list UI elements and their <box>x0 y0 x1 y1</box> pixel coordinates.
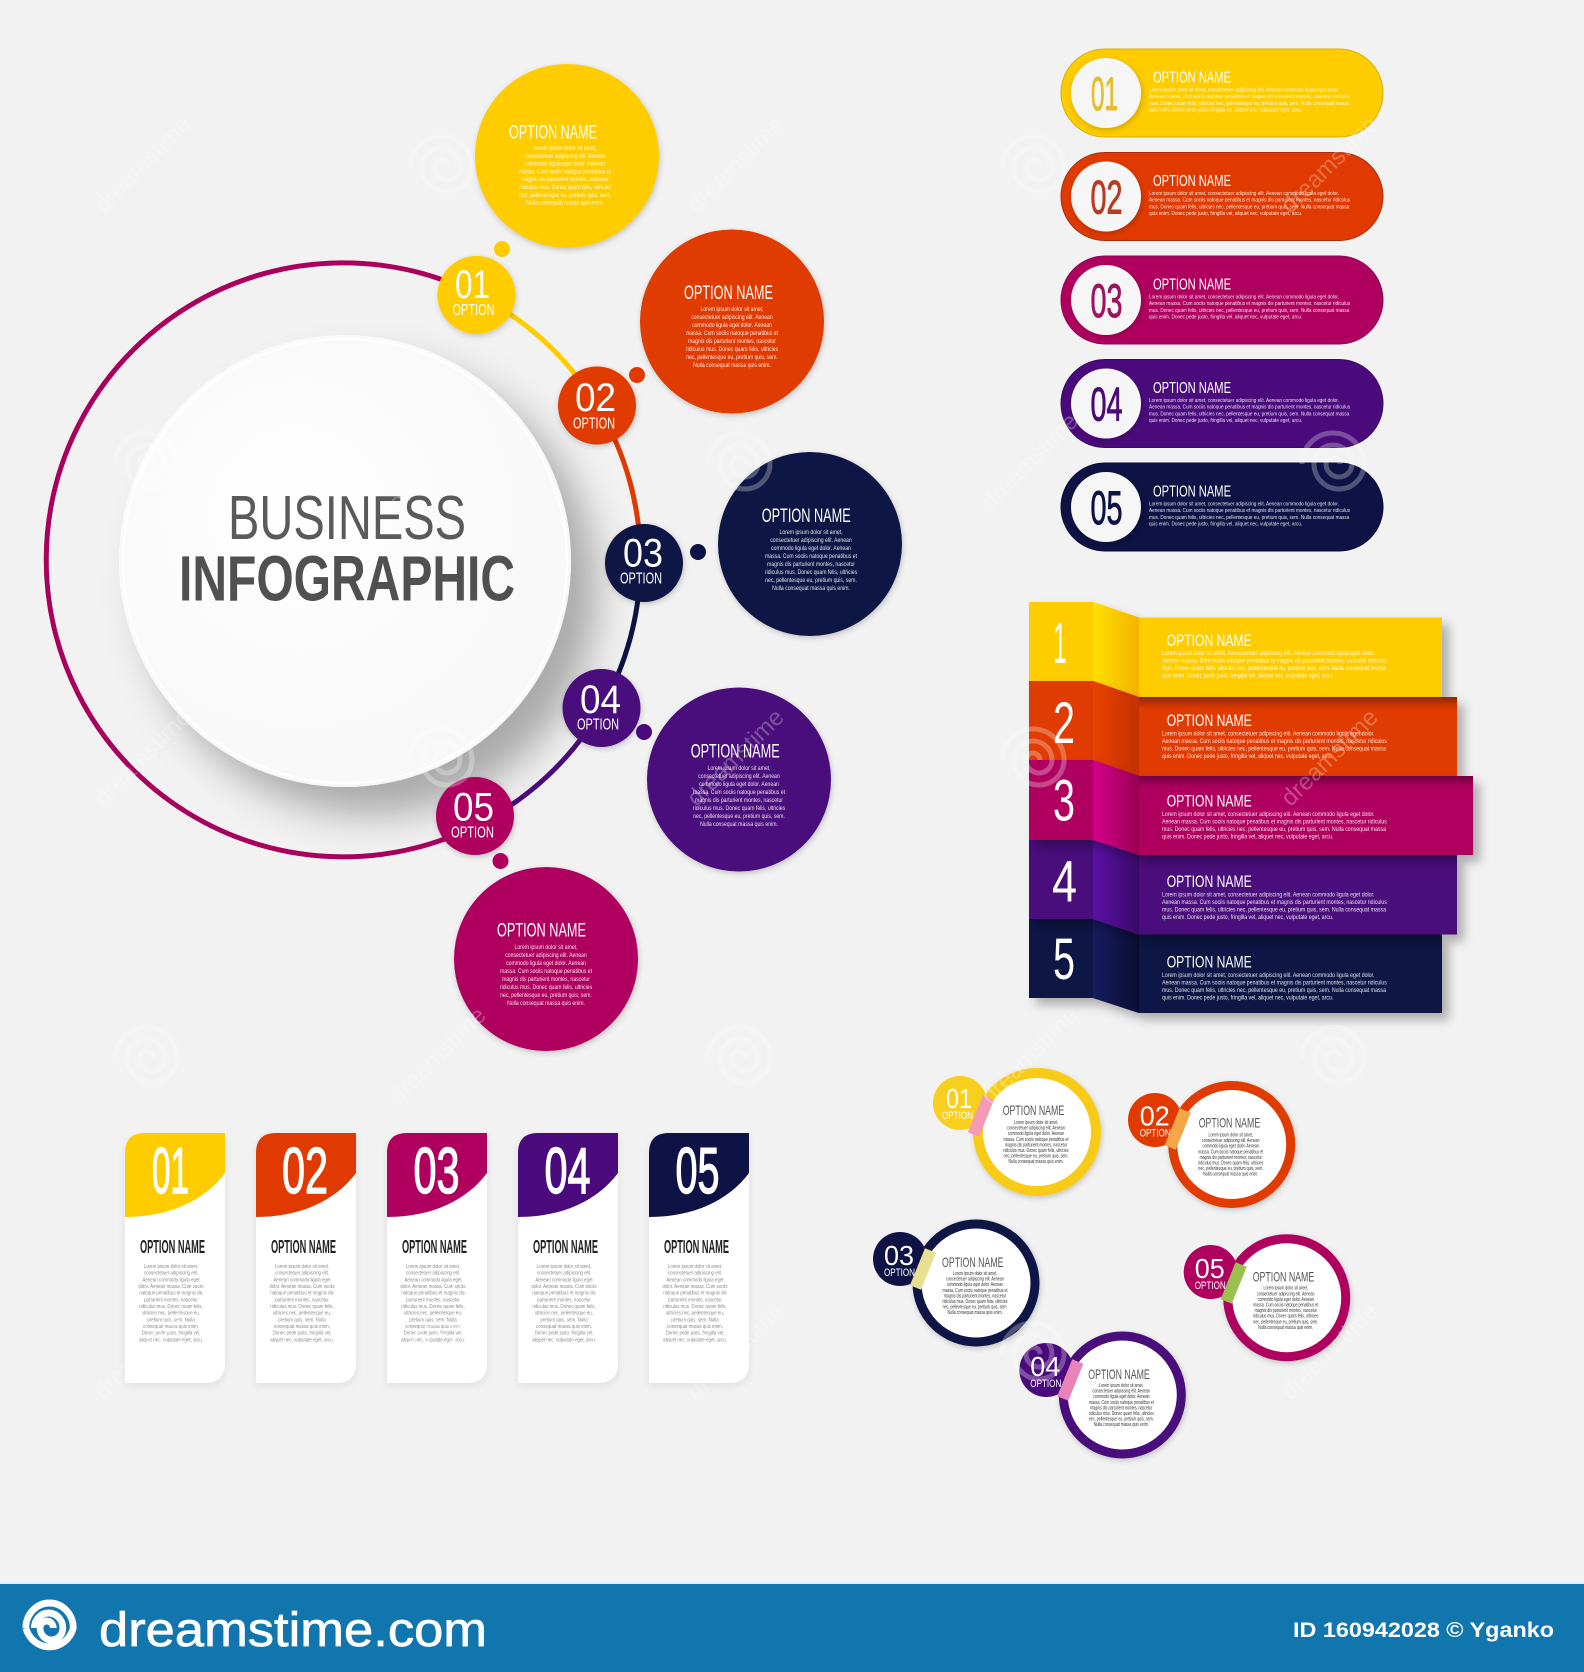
pill 01 <box>1061 49 1383 137</box>
option bubble 05 <box>454 867 638 1051</box>
pill 04: Aenean massa. Cum sociis natoque penatibus et magnis dis parturient montes, nascetur ridiculus <box>1149 404 1350 411</box>
ring badge 05: OPTION <box>1195 1280 1226 1292</box>
node 02: OPTION <box>573 416 615 433</box>
ring badge 05: consectetuer adipiscing elit. Aenean <box>1257 1291 1315 1296</box>
card 02: ridiculus mus. Donec quam felis, <box>270 1304 334 1310</box>
image id: ID 160942028 © Yganko <box>1293 1619 1554 1642</box>
watermark overlay: dreamstime <box>89 704 197 812</box>
card 03: consectetuer adipiscing elit. <box>406 1270 460 1277</box>
ring badge 05: magnis dis parturient montes, nascetur <box>1255 1307 1317 1313</box>
panel: vertical cards <box>125 1133 749 1383</box>
card 04: consequat massa quis enim. <box>536 1324 592 1330</box>
card 01: Lorem ipsum dolor sit amet, <box>144 1264 198 1270</box>
central white disc with title <box>119 335 571 787</box>
option bubble 04: consectetuer adipiscing elit. Aenean <box>698 774 780 780</box>
card 01: ultricies nec, pellentesque eu, <box>142 1310 200 1317</box>
ring badge 04: nec, pellentesque eu, pretium quis, sem. <box>1089 1416 1154 1422</box>
ribbon 4: 4 <box>1052 850 1077 915</box>
pill 05: mus. Donec quam felis, ultricies nec, pellentesque eu, pretium quis, sem. Nulla consequat massa <box>1149 514 1349 521</box>
ring badge 02: 02 <box>1140 1100 1170 1132</box>
icon: spiral logo <box>26 1603 73 1647</box>
ring track <box>46 263 640 857</box>
ring badge 03: magnis dis parturient montes, nascetur <box>944 1293 1007 1299</box>
card 02: consequat massa quis enim. <box>274 1324 330 1330</box>
ribbon 1: mus. Donec quam felis, ultricies nec, pellentesque eu, pretium quis, sem. Nulla consequat massa <box>1162 666 1387 672</box>
ring badge 05: nec, pellentesque eu, pretium quis, sem. <box>1253 1319 1318 1324</box>
option bubble 03: massa. Cum sociis natoque penatibus et <box>765 554 857 560</box>
watermark overlay: dreamstime <box>89 111 197 219</box>
card 05 <box>649 1133 749 1383</box>
card 05: ultricies nec, pellentesque eu, <box>666 1310 724 1317</box>
card 05: pretium quis, sem. Nulla <box>671 1317 719 1324</box>
ribbon 3: Lorem ipsum dolor sit amet, consectetuer adipiscing elit. Aenean commodo ligula eget dolor. <box>1162 812 1375 818</box>
ribbon 2: OPTION NAME <box>1167 711 1252 730</box>
node 05 <box>436 777 514 869</box>
pill 02: Aenean massa. Cum sociis natoque penatibus et magnis dis parturient montes, nascetur ridiculus <box>1149 197 1350 204</box>
ribbon 4: quis enim. Donec pede justo, fringilla vel, aliquet nec, vulputate eget, arcu. <box>1162 915 1334 921</box>
card 04: pretium quis, sem. Nulla <box>540 1317 588 1324</box>
option bubble 01: Nulla consequat massa quis enim. <box>526 200 604 207</box>
option bubble 02: ridiculus mus. Donec quam felis, ultricies <box>686 347 778 353</box>
option bubble 03: consectetuer adipiscing elit. Aenean <box>770 538 852 544</box>
card 03: ridiculus mus. Donec quam felis, <box>401 1304 465 1310</box>
card 02: dolor. Aenean massa. Cum sociis <box>269 1284 335 1290</box>
ring badge 05 <box>1184 1239 1346 1357</box>
option bubble 04 <box>647 688 831 872</box>
pill 02: OPTION NAME <box>1153 173 1231 190</box>
pill 03: 03 <box>1090 274 1122 327</box>
ribbon 2: 2 <box>1053 691 1075 756</box>
pill 05: Aenean massa. Cum sociis natoque penatibus et magnis dis parturient montes, nascetur ridiculus <box>1149 508 1350 514</box>
pill 02: 02 <box>1090 170 1122 224</box>
node 05: OPTION <box>451 824 494 842</box>
option bubble 04: ridiculus mus. Donec quam felis, ultricies <box>693 806 785 812</box>
option bubble 04: OPTION NAME <box>691 742 780 763</box>
option bubble 05: commodo ligula eget dolor. Aenean <box>506 961 586 967</box>
node 04 <box>562 669 652 747</box>
option bubble 02: Nulla consequat massa quis enim. <box>693 363 771 369</box>
title: INFOGRAPHIC <box>179 543 515 615</box>
node 02: 02 <box>575 376 616 420</box>
card 01: consectetuer adipiscing elit. <box>144 1270 198 1277</box>
panel: taped ring badges <box>873 1073 1346 1454</box>
node 03: OPTION <box>620 571 662 588</box>
pill 01: Lorem ipsum dolor sit amet, consectetuer adipiscing elit. Aenean commodo ligula eget dolor. <box>1149 87 1339 94</box>
card 03: pretium quis, sem. Nulla <box>409 1317 457 1324</box>
pill 02: quis enim. Donec pede justo, fringilla vel, aliquet nec, vulputate eget, arcu. <box>1149 211 1302 217</box>
watermark overlay: dreamstime <box>384 1002 492 1110</box>
watermark overlay: dreamstime <box>682 704 790 812</box>
pill 03 <box>1061 256 1383 344</box>
option bubble 02: OPTION NAME <box>684 283 773 304</box>
option bubble 01: massa. Cum sociis natoque penatibus et <box>519 169 611 176</box>
card 05: ridiculus mus. Donec quam felis, <box>663 1304 727 1310</box>
ribbon 1: 1 <box>1053 611 1067 676</box>
ring badge 01: magnis dis parturient montes, nascetur <box>1005 1142 1068 1148</box>
ring badge 04: magnis dis parturient montes, nascetur <box>1090 1405 1153 1411</box>
ribbon 4 <box>1029 840 1457 934</box>
pill 03: quis enim. Donec pede justo, fringilla vel, aliquet nec, vulputate eget, arcu. <box>1149 314 1302 321</box>
ring badge 04: commodo ligula eget dolor. Aenean <box>1093 1394 1150 1399</box>
pill 03: Aenean massa. Cum sociis natoque penatibus et magnis dis parturient montes, nascetur ridiculus <box>1149 301 1350 307</box>
ring badge 03: nec, pellentesque eu, pretium quis, sem. <box>943 1304 1007 1310</box>
ribbon 1: OPTION NAME <box>1167 631 1252 650</box>
pill 01: quis enim. Donec pede justo, fringilla vel, aliquet nec, vulputate eget, arcu. <box>1149 107 1302 114</box>
card 01: 01 <box>152 1134 189 1207</box>
card 01: consequat massa quis enim. <box>143 1324 199 1330</box>
card 05: consectetuer adipiscing elit. <box>668 1270 722 1277</box>
ring badge 01: nec, pellentesque eu, pretium quis, sem. <box>1004 1153 1068 1159</box>
option bubble 01: Lorem ipsum dolor sit amet, <box>533 146 597 152</box>
card 03: OPTION NAME <box>402 1236 467 1257</box>
option bubble 03: Lorem ipsum dolor sit amet, <box>779 530 843 536</box>
option bubble 02: Lorem ipsum dolor sit amet, <box>700 307 764 313</box>
ring badge 04: Lorem ipsum dolor sit amet, <box>1099 1382 1144 1388</box>
card 05: aliquet nec, vulputate eget, arcu. <box>663 1337 727 1344</box>
option bubble 05: magnis dis parturient montes, nascetur <box>502 977 590 983</box>
ribbon 3: quis enim. Donec pede justo, fringilla vel, aliquet nec, vulputate eget, arcu. <box>1162 834 1334 841</box>
ribbon 1 <box>1029 602 1442 697</box>
pill 04: 04 <box>1090 378 1122 430</box>
card 04: ultricies nec, pellentesque eu, <box>535 1310 593 1317</box>
ring badge 05: 05 <box>1195 1253 1225 1284</box>
ring badge 03: commodo ligula eget dolor. Aenean <box>947 1282 1004 1287</box>
card 02: 02 <box>282 1134 328 1207</box>
ribbon 4: Lorem ipsum dolor sit amet, consectetuer adipiscing elit. Aenean commodo ligula eget dolor. <box>1162 892 1375 899</box>
ring badge 03: Lorem ipsum dolor sit amet, <box>953 1270 997 1276</box>
ring badge 04: massa. Cum sociis natoque penatibus et <box>1089 1399 1154 1405</box>
ring badge 01: OPTION NAME <box>1003 1102 1064 1118</box>
card 04: aliquet nec, vulputate eget, arcu. <box>532 1337 596 1344</box>
card 04 <box>518 1133 618 1383</box>
option bubble 02: consectetuer adipiscing elit. Aenean <box>691 315 773 321</box>
card 02: Donec pede justo, fringilla vel, <box>273 1330 331 1337</box>
ribbon 1: Lorem ipsum dolor sit amet, consectetuer adipiscing elit. Aenean commodo ligula eget dolor. <box>1162 651 1375 657</box>
card 04: parturient montes, nascetur <box>537 1297 591 1304</box>
ribbon 1: Aenean massa. Cum sociis natoque penatibus et magnis dis parturient montes, nascetur ridiculus <box>1162 658 1387 665</box>
option bubble 03: magnis dis parturient montes, nascetur <box>767 562 855 568</box>
card 03: parturient montes, nascetur <box>406 1297 460 1304</box>
watermark overlay: dreamstime <box>976 1002 1084 1110</box>
ribbon 1: quis enim. Donec pede justo, fringilla vel, aliquet nec, vulputate eget, arcu. <box>1162 673 1334 680</box>
card 04: natoque penatibus et magnis dis <box>532 1290 596 1297</box>
option bubble 04: Lorem ipsum dolor sit amet, <box>707 766 771 772</box>
watermark overlay: dreamstime <box>976 408 1084 516</box>
node 03 <box>605 524 706 602</box>
ribbon 5: Lorem ipsum dolor sit amet, consectetuer adipiscing elit. Aenean commodo ligula eget dolor. <box>1162 973 1375 979</box>
option bubble 01: OPTION NAME <box>509 123 597 144</box>
ring badge 02: OPTION NAME <box>1199 1114 1260 1130</box>
ring badge 04: OPTION <box>1030 1378 1061 1390</box>
option bubble 04: magnis dis parturient montes, nascetur <box>695 798 783 804</box>
ring badge 04: Nulla consequat massa quis enim. <box>1094 1422 1149 1427</box>
ribbon 5: Aenean massa. Cum sociis natoque penatibus et magnis dis parturient montes, nascetur ridiculus <box>1162 980 1387 987</box>
card 03: aliquet nec, vulputate eget, arcu. <box>401 1337 465 1344</box>
title <box>179 484 515 615</box>
card 03 <box>387 1133 487 1383</box>
ribbon 4: Aenean massa. Cum sociis natoque penatibus et magnis dis parturient montes, nascetur ridiculus <box>1162 900 1387 906</box>
node 04: 04 <box>580 678 621 722</box>
option bubble 02: massa. Cum sociis natoque penatibus et <box>686 331 778 337</box>
ribbon 2: quis enim. Donec pede justo, fringilla vel, aliquet nec, vulputate eget, arcu. <box>1162 754 1334 760</box>
card 01: OPTION NAME <box>140 1236 205 1257</box>
watermark overlay: dreamstime <box>384 408 492 516</box>
watermark overlay: dreamstime <box>89 1298 197 1406</box>
watermark overlay: dreamstime <box>1276 111 1384 219</box>
brand name: dreamstime.com <box>99 1604 487 1657</box>
ring badge 02: massa. Cum sociis natoque penatibus et <box>1198 1149 1264 1154</box>
ring badge 03: OPTION NAME <box>942 1254 1004 1270</box>
ring badge 02: Nulla consequat massa quis enim. <box>1203 1171 1258 1177</box>
ribbon 3 <box>1029 760 1473 855</box>
ribbon 3: 3 <box>1053 769 1075 834</box>
ring badge 03: consectetuer adipiscing elit. Aenean <box>946 1276 1004 1282</box>
ring badge 03 <box>873 1224 1035 1342</box>
ribbon 5: OPTION NAME <box>1167 953 1252 972</box>
option bubble 03: Nulla consequat massa quis enim. <box>772 586 850 592</box>
ribbon 2: Lorem ipsum dolor sit amet, consectetuer adipiscing elit. Aenean commodo ligula eget dolor. <box>1162 731 1375 738</box>
ring badge 04 <box>1019 1336 1181 1454</box>
card 03: Lorem ipsum dolor sit amet, <box>406 1264 460 1270</box>
ring badge 05: Lorem ipsum dolor sit amet, <box>1263 1285 1308 1291</box>
watermark overlay <box>89 111 1384 1406</box>
ring badge 05: commodo ligula eget dolor. Aenean <box>1258 1296 1314 1302</box>
ring badge 02: Lorem ipsum dolor sit amet, <box>1208 1132 1253 1138</box>
option bubble 01: commodo ligula eget dolor. Aenean <box>525 161 605 168</box>
ribbon 3: Aenean massa. Cum sociis natoque penatibus et magnis dis parturient montes, nascetur ridiculus <box>1162 819 1387 826</box>
card 05: Aenean commodo ligula eget <box>666 1277 724 1284</box>
ribbon 4: OPTION NAME <box>1167 872 1252 891</box>
option bubble 05: consectetuer adipiscing elit. Aenean <box>505 953 587 959</box>
pill 05: Lorem ipsum dolor sit amet, consectetuer adipiscing elit. Aenean commodo ligula eget dolor. <box>1149 501 1339 508</box>
pill 04: quis enim. Donec pede justo, fringilla vel, aliquet nec, vulputate eget, arcu. <box>1149 418 1302 424</box>
card 05: OPTION NAME <box>664 1236 729 1257</box>
option bubble 01: nec, pellentesque eu, pretium quis, sem. <box>519 192 611 199</box>
option bubble 02: magnis dis parturient montes, nascetur <box>688 339 776 345</box>
ribbon 2 <box>1029 681 1457 776</box>
option bubble 05: ridiculus mus. Donec quam felis, ultricies <box>500 985 592 991</box>
panel: pill list <box>1061 49 1383 551</box>
pill 02 <box>1061 152 1383 240</box>
card 02: Aenean commodo ligula eget <box>273 1277 331 1284</box>
option bubble 05: Nulla consequat massa quis enim. <box>507 1001 585 1007</box>
card 05: parturient montes, nascetur <box>668 1297 722 1304</box>
node 02 <box>558 366 645 444</box>
ribbon 2: Aenean massa. Cum sociis natoque penatibus et magnis dis parturient montes, nascetur ridiculus <box>1162 739 1387 745</box>
ring badge 02: ridiculus mus. Donec quam felis, ultricies <box>1198 1160 1264 1166</box>
card 01: ridiculus mus. Donec quam felis, <box>139 1304 203 1310</box>
node 01: OPTION <box>452 302 494 319</box>
card 02: OPTION NAME <box>271 1236 336 1257</box>
card 02: Lorem ipsum dolor sit amet, <box>275 1264 329 1270</box>
pill 05: 05 <box>1090 481 1122 534</box>
ribbon 5: 5 <box>1053 927 1075 992</box>
card 04: dolor. Aenean massa. Cum sociis <box>531 1284 597 1290</box>
card 04: OPTION NAME <box>533 1236 598 1257</box>
card 03: natoque penatibus et magnis dis <box>401 1290 465 1297</box>
pill 01: 01 <box>1091 67 1118 120</box>
pill 05: quis enim. Donec pede justo, fringilla vel, aliquet nec, vulputate eget, arcu. <box>1149 521 1302 528</box>
card 04: Lorem ipsum dolor sit amet, <box>537 1264 591 1270</box>
option bubble 04: massa. Cum sociis natoque penatibus et <box>693 790 785 796</box>
card 04: Aenean commodo ligula eget <box>535 1277 593 1284</box>
card 01: Aenean commodo ligula eget <box>142 1277 200 1284</box>
pill 01: Aenean massa. Cum sociis natoque penatibus et magnis dis parturient montes, nascetur ridiculus <box>1149 94 1350 100</box>
node 05: 05 <box>453 786 494 830</box>
card 05: dolor. Aenean massa. Cum sociis <box>662 1284 728 1290</box>
node 04: OPTION <box>577 717 619 734</box>
option bubble 03: OPTION NAME <box>762 506 851 527</box>
option bubble 03 <box>718 452 902 636</box>
ring badge 05: OPTION NAME <box>1253 1269 1314 1285</box>
option bubble 04: commodo ligula eget dolor. Aenean <box>699 782 779 788</box>
node 01 <box>438 241 516 334</box>
card 03: consequat massa quis enim. <box>405 1324 461 1330</box>
card 02: parturient montes, nascetur <box>275 1297 329 1304</box>
pill 04: OPTION NAME <box>1153 380 1231 397</box>
panel: circular business infographic <box>46 64 902 1051</box>
card 04: consectetuer adipiscing elit. <box>537 1270 591 1277</box>
ring badge 03: 03 <box>884 1240 914 1271</box>
card 05: natoque penatibus et magnis dis <box>663 1290 727 1297</box>
card 03: dolor. Aenean massa. Cum sociis <box>400 1284 466 1290</box>
ribbon 5: quis enim. Donec pede justo, fringilla vel, aliquet nec, vulputate eget, arcu. <box>1162 995 1334 1002</box>
card 02 <box>256 1133 356 1383</box>
ribbon 4: mus. Donec quam felis, ultricies nec, pellentesque eu, pretium quis, sem. Nulla consequat massa <box>1162 907 1387 914</box>
pill 01: mus. Donec quam felis, ultricies nec, pellentesque eu, pretium quis, sem. Nulla consequat massa <box>1149 100 1349 107</box>
ring badge 02: OPTION <box>1140 1128 1171 1140</box>
card 05: consequat massa quis enim. <box>667 1324 723 1330</box>
pill 03: OPTION NAME <box>1153 277 1231 294</box>
ring badge 02 <box>1128 1086 1291 1204</box>
card 04: 04 <box>544 1134 590 1207</box>
node 03: 03 <box>623 532 663 576</box>
option bubble 02: commodo ligula eget dolor. Aenean <box>692 323 772 329</box>
ring badge 03: massa. Cum sociis natoque penatibus et <box>943 1287 1008 1293</box>
card 01 <box>125 1133 225 1383</box>
option bubble 05: massa. Cum sociis natoque penatibus et <box>500 969 592 975</box>
card 01: dolor. Aenean massa. Cum sociis <box>138 1284 204 1290</box>
ring badge 03: OPTION <box>884 1267 915 1279</box>
ribbon 5 <box>1029 919 1442 1013</box>
watermark overlay: dreamstime <box>682 111 790 219</box>
card 02: pretium quis, sem. Nulla <box>278 1317 326 1324</box>
pill 03: Lorem ipsum dolor sit amet, consectetuer adipiscing elit. Aenean commodo ligula eget dolor. <box>1149 294 1339 301</box>
option bubble 04: Nulla consequat massa quis enim. <box>700 822 778 828</box>
watermark overlay: dreamstime <box>682 1298 790 1406</box>
option bubble 02 <box>640 230 824 414</box>
ring badge 03: ridiculus mus. Donec quam felis, ultricies <box>942 1298 1008 1304</box>
card 01: Donec pede justo, fringilla vel, <box>142 1330 200 1337</box>
card 02: consectetuer adipiscing elit. <box>275 1270 329 1277</box>
footer bar <box>0 1582 1584 1672</box>
card 05: 05 <box>676 1134 720 1207</box>
card 02: natoque penatibus et magnis dis <box>270 1290 334 1297</box>
card 05: Donec pede justo, fringilla vel, <box>666 1330 724 1337</box>
option bubble 02: nec, pellentesque eu, pretium quis, sem. <box>686 355 778 361</box>
card 01: parturient montes, nascetur <box>144 1297 198 1304</box>
card 04: ridiculus mus. Donec quam felis, <box>532 1304 596 1310</box>
card 03: Aenean commodo ligula eget <box>404 1277 462 1284</box>
pill 05: OPTION NAME <box>1153 484 1231 501</box>
ring badge 02: magnis dis parturient montes, nascetur <box>1200 1154 1262 1160</box>
option bubble 01: ridiculus mus. Donec quam felis, ultricies <box>519 185 611 191</box>
ring badge 01: Nulla consequat massa quis enim. <box>1009 1159 1063 1164</box>
card 01: pretium quis, sem. Nulla <box>147 1317 195 1324</box>
card 01: aliquet nec, vulputate eget, arcu. <box>139 1337 203 1344</box>
option bubble 05: Lorem ipsum dolor sit amet, <box>514 945 578 951</box>
ring badge 03: Nulla consequat massa quis enim. <box>948 1310 1002 1315</box>
card 02: aliquet nec, vulputate eget, arcu. <box>270 1337 334 1344</box>
watermark overlay: dreamstime <box>1276 1298 1384 1406</box>
ring badge 01: Lorem ipsum dolor sit amet, <box>1014 1119 1058 1125</box>
ring badge 02: commodo ligula eget dolor. Aenean <box>1203 1143 1259 1149</box>
pill 04: mus. Donec quam felis, ultricies nec, pellentesque eu, pretium quis, sem. Nulla consequat massa <box>1149 411 1349 418</box>
pill 04: Lorem ipsum dolor sit amet, consectetuer adipiscing elit. Aenean commodo ligula eget dolor. <box>1149 398 1339 404</box>
ring badge 01: commodo ligula eget dolor. Aenean <box>1008 1131 1065 1136</box>
ring badge 01: OPTION <box>942 1110 973 1122</box>
ring badge 01: ridiculus mus. Donec quam felis, ultricies <box>1003 1147 1069 1153</box>
option bubble 05: OPTION NAME <box>497 920 586 942</box>
ribbon 3: OPTION NAME <box>1167 792 1252 811</box>
ribbon 3: mus. Donec quam felis, ultricies nec, pellentesque eu, pretium quis, sem. Nulla consequat massa <box>1162 827 1387 833</box>
card 03: ultricies nec, pellentesque eu, <box>404 1310 462 1317</box>
ring badge 02: consectetuer adipiscing elit. Aenean <box>1202 1137 1260 1143</box>
ring badge 04: consectetuer adipiscing elit. Aenean <box>1093 1388 1151 1394</box>
ring badge 04: OPTION NAME <box>1088 1366 1150 1382</box>
option bubble 01 <box>475 64 659 248</box>
ribbon 5: mus. Donec quam felis, ultricies nec, pellentesque eu, pretium quis, sem. Nulla consequat massa <box>1162 988 1387 994</box>
ring badge 01: 01 <box>946 1083 972 1114</box>
pill 02: mus. Donec quam felis, ultricies nec, pellentesque eu, pretium quis, sem. Nulla consequat massa <box>1149 204 1349 211</box>
node 01: 01 <box>455 263 490 307</box>
pill 05 <box>1061 463 1383 551</box>
ring badge 04: 04 <box>1030 1351 1060 1382</box>
ring badge 05: massa. Cum sociis natoque penatibus et <box>1253 1302 1319 1308</box>
panel: folded ribbon list <box>1029 602 1473 1013</box>
option bubble 01: consectetuer adipiscing elit. Aenean <box>524 153 606 160</box>
ring badge 01 <box>933 1073 1096 1191</box>
title: BUSINESS <box>228 484 466 553</box>
card 03: 03 <box>414 1134 460 1207</box>
card 02: ultricies nec, pellentesque eu, <box>273 1310 331 1317</box>
ring badge 01: massa. Cum sociis natoque penatibus et <box>1004 1136 1069 1142</box>
pill 04 <box>1061 360 1383 448</box>
pill 03: mus. Donec quam felis, ultricies nec, pellentesque eu, pretium quis, sem. Nulla consequat massa <box>1149 307 1349 314</box>
watermark overlay: dreamstime <box>1276 704 1384 812</box>
ring badge 01: consectetuer adipiscing elit. Aenean <box>1007 1125 1065 1131</box>
card 03: Donec pede justo, fringilla vel, <box>404 1330 462 1337</box>
card 04: Donec pede justo, fringilla vel, <box>535 1330 593 1337</box>
ring badge 04: ridiculus mus. Donec quam felis, ultricies <box>1089 1410 1155 1416</box>
ring badge 02: nec, pellentesque eu, pretium quis, sem. <box>1198 1165 1263 1171</box>
pill 01: OPTION NAME <box>1153 70 1231 87</box>
option bubble 03: nec, pellentesque eu, pretium quis, sem. <box>765 578 857 584</box>
option bubble 04: nec, pellentesque eu, pretium quis, sem. <box>693 814 785 820</box>
option bubble 05: nec, pellentesque eu, pretium quis, sem. <box>500 993 592 999</box>
card 01: natoque penatibus et magnis dis <box>139 1290 203 1297</box>
ribbon 2: mus. Donec quam felis, ultricies nec, pellentesque eu, pretium quis, sem. Nulla consequat massa <box>1162 746 1387 753</box>
pill 02: Lorem ipsum dolor sit amet, consectetuer adipiscing elit. Aenean commodo ligula eget dolor. <box>1149 191 1339 197</box>
option bubble 03: commodo ligula eget dolor. Aenean <box>771 546 851 552</box>
option bubble 01: magnis dis parturient montes, nascetur <box>521 177 609 183</box>
option bubble 03: ridiculus mus. Donec quam felis, ultricies <box>765 570 857 576</box>
ring badge 05: Nulla consequat massa quis enim. <box>1258 1324 1313 1330</box>
card 05: Lorem ipsum dolor sit amet, <box>668 1264 722 1270</box>
ring badge 05: ridiculus mus. Donec quam felis, ultricies <box>1253 1313 1319 1319</box>
